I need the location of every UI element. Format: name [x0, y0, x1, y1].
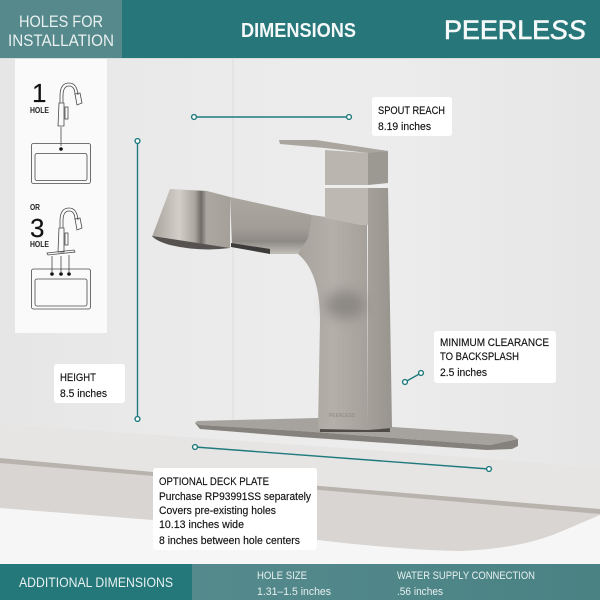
handle [279, 140, 388, 225]
callout: height: 8.5 inches [60, 388, 107, 400]
callout: optional deck plate: OPTIONAL DECK PLATE [159, 476, 269, 488]
callout: spout reach: SPOUT REACH [378, 105, 445, 117]
arrow: height [135, 139, 140, 421]
water supply connection: WATER SUPPLY CONNECTION [397, 570, 535, 582]
three hole option: OR [30, 203, 40, 212]
hole size: HOLE SIZE [257, 570, 307, 582]
three hole option [30, 203, 90, 309]
shading on the column curve [325, 291, 365, 319]
callout: optional deck plate [153, 468, 317, 550]
footer bar: additional dimensions: ADDITIONAL DIMENSIONS [19, 574, 173, 590]
header tab: holes for installation: HOLES FOR [19, 12, 103, 31]
faucet column [298, 215, 368, 430]
header tab: holes for installation [0, 0, 122, 58]
callout: spout reach [372, 97, 452, 136]
callout: height [54, 364, 125, 403]
title: DIMENSIONS [241, 20, 356, 42]
pull-out spout [152, 189, 312, 254]
hole size: 1.31–1.5 inches [257, 586, 331, 598]
callout: minimum clearance [434, 331, 556, 383]
header tab: holes for installation: INSTALLATION [8, 31, 114, 50]
three hole option: 3 [30, 213, 44, 243]
logo: PEERLESS [444, 15, 586, 45]
callout: height: HEIGHT [60, 372, 96, 384]
water supply connection [397, 570, 535, 598]
arrow: deck plate width [193, 445, 491, 471]
three hole option: HOLE [30, 240, 50, 249]
water supply connection: .56 inches [397, 586, 443, 598]
deck plate [195, 418, 518, 450]
callout: spout reach: 8.19 inches [378, 121, 431, 133]
callout: optional deck plate: 10.13 inches wide [159, 519, 244, 531]
callout: optional deck plate: Purchase RP93991SS separately [159, 491, 311, 503]
arrow: spout reach [192, 115, 351, 119]
hole size [257, 570, 331, 598]
callout: optional deck plate: Covers pre-existing holes [159, 505, 276, 517]
callout: minimum clearance: MINIMUM CLEARANCE [440, 337, 549, 349]
one hole option: HOLE [30, 106, 50, 115]
callout: optional deck plate: 8 inches between hole centers [159, 535, 300, 547]
footer bar: additional dimensions [0, 564, 600, 600]
one hole option: 1 [32, 78, 46, 108]
arrow: backsplash clearance [403, 371, 423, 384]
callout: minimum clearance: TO BACKSPLASH [440, 351, 519, 363]
header bar [0, 0, 600, 59]
panel: holes for installation [15, 59, 107, 333]
faucet photo [152, 140, 518, 450]
one hole option [30, 78, 90, 184]
callout: minimum clearance: 2.5 inches [440, 367, 487, 379]
brand mark on column: PEERLESS [329, 413, 356, 419]
